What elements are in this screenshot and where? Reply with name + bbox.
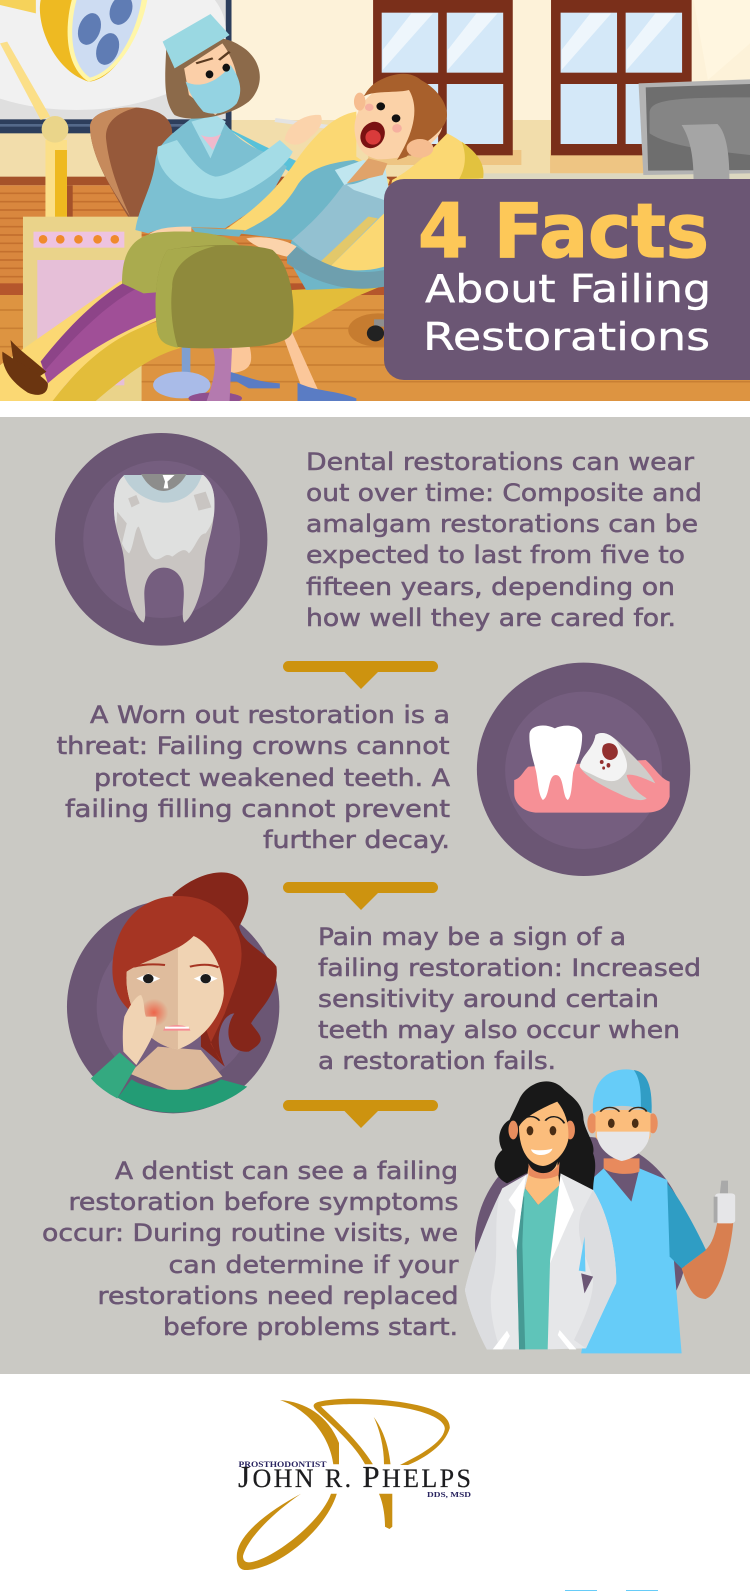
stool and dentist legs (153, 332, 356, 404)
text: worn out restoration is a threat: A Worn out restoration is a (90, 701, 450, 729)
dental lamp (0, 0, 147, 220)
equipment cabinet (23, 217, 142, 401)
text: dentist can see a failing restoration: can determine if your (168, 1251, 459, 1279)
text: dentist can see a failing restoration: restorations need replaced (98, 1282, 458, 1310)
subtitle: About Failing: About Failing (425, 267, 711, 311)
text: pain may be a sign: failing restoration: Increased (318, 954, 701, 982)
text: dental restorations wear out: out over time: Composite and (306, 479, 702, 507)
logo swash monogram (237, 1399, 450, 1570)
monitor (483, 79, 750, 181)
logo: name: JOHN R. PHELPS (238, 1459, 471, 1494)
text: pain may be a sign (318, 923, 701, 1075)
arrow: step three to four (283, 1100, 438, 1128)
text: dental restorations wear out: fifteen years, depending on (306, 573, 675, 601)
patient (148, 74, 447, 290)
logo: John R. Phelps (237, 1399, 471, 1570)
text: worn out restoration is a threat: threat: Failing crowns cannot (56, 732, 450, 760)
icon: healthy and decayed teeth (477, 663, 690, 876)
window left (368, 0, 521, 165)
patient chair (225, 112, 484, 333)
text: pain may be a sign: Pain may be a sign of a (318, 923, 626, 951)
icon: woman with tooth pain (67, 872, 279, 1113)
arrow: step one to two (283, 661, 438, 689)
window right (550, 0, 692, 173)
text: worn out restoration is a threat: further decay. (263, 826, 450, 854)
title: 4 Facts: 4 Facts (418, 187, 709, 275)
text: pain may be a sign: sensitivity around certain (318, 985, 659, 1013)
text: dentist can see a failing restoration: occur: During routine visits, we (42, 1219, 458, 1247)
title panel (384, 179, 750, 380)
panel: facts (0, 417, 750, 1374)
chair wheel (348, 314, 384, 346)
logo: credentials: DDS, MSD (427, 1491, 471, 1499)
green knee cover (122, 231, 294, 348)
hero illustration: dentist treating patient (0, 0, 750, 404)
text: pain may be a sign: teeth may also occur when (318, 1016, 680, 1044)
text: dentist can see a failing restoration: A dentist can see a failing (115, 1157, 458, 1185)
icon: two dentists (465, 1069, 735, 1353)
text: dentist can see a failing restoration: restoration before symptoms (68, 1188, 458, 1216)
dentist stool back (90, 108, 172, 217)
text: dental restorations wear out: amalgam restorations can be (306, 510, 698, 538)
text: pain may be a sign: a restoration fails. (318, 1047, 556, 1075)
text: dentist can see a failing restoration (42, 1157, 459, 1341)
text: worn out restoration is a threat: protect weakened teeth. A (94, 764, 451, 792)
clinic room background (0, 0, 750, 401)
text: dental restorations wear out: expected to last from five to (306, 541, 685, 569)
bottom edge marks (565, 1590, 658, 1591)
poster with lamp shadow (0, 0, 232, 133)
text: dentist can see a failing restoration: before problems start. (163, 1313, 458, 1341)
text: dental restorations wear out: Dental restorations can wear (306, 448, 694, 476)
text: dental restorations wear out (306, 448, 702, 632)
logo: prosthodontist: PROSTHODONTIST (238, 1460, 327, 1469)
patient legs and footrest (0, 280, 182, 401)
text: worn out restoration is a threat (56, 701, 451, 854)
icon: worn tooth (55, 433, 267, 646)
arrow: step two to three (283, 882, 438, 910)
text: dental restorations wear out: how well they are cared for. (306, 604, 676, 632)
dentist (135, 14, 350, 233)
text: worn out restoration is a threat: failing filling cannot prevent (65, 795, 450, 823)
subtitle: Restorations: Restorations (423, 315, 710, 359)
